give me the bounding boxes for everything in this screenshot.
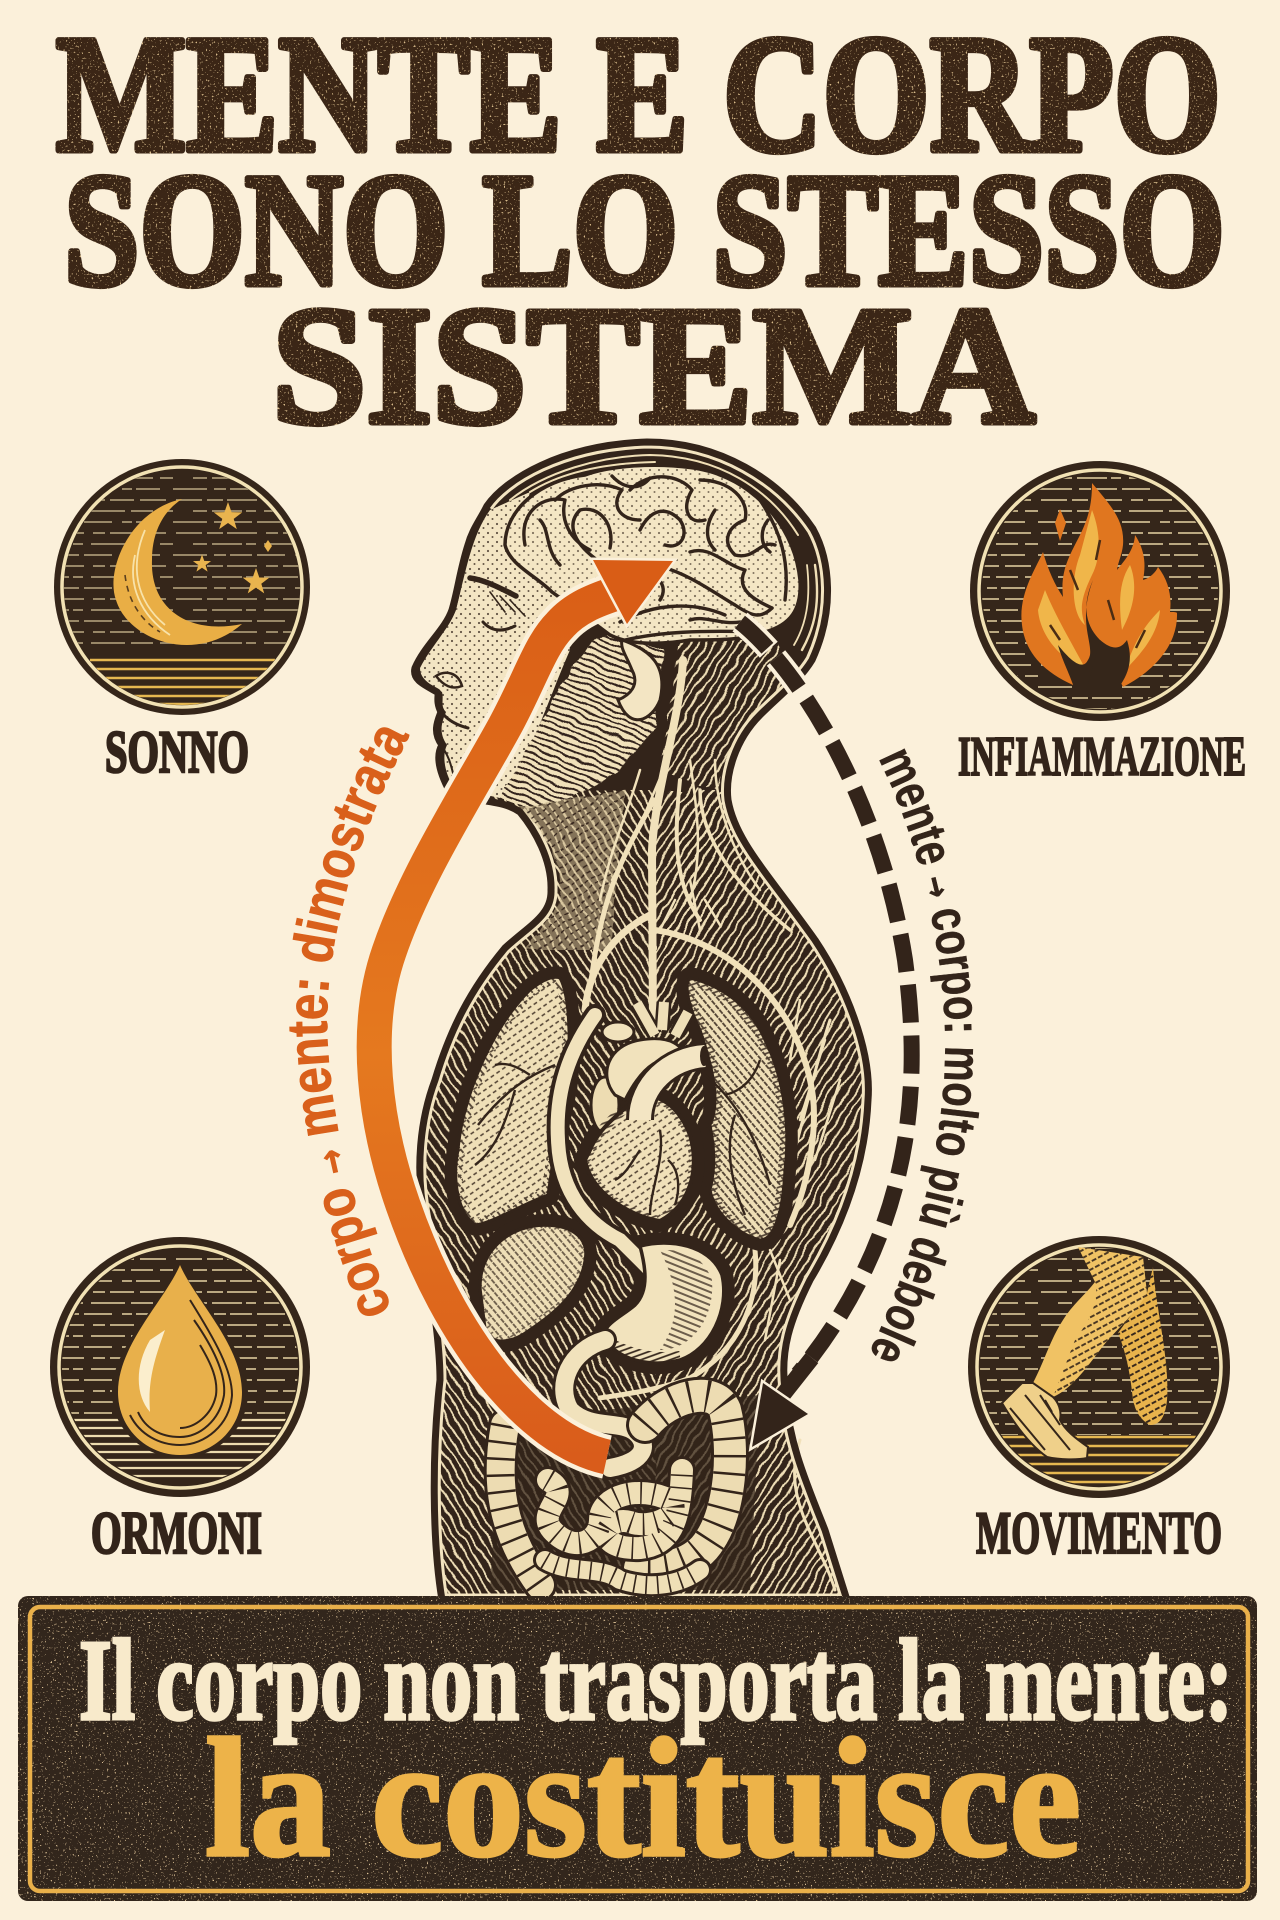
icon: hormone drop [112,1265,248,1458]
right colon [640,1396,730,1568]
icon: crescent moon [113,499,242,645]
icon: stars [193,502,272,593]
intestine bed [490,1395,760,1590]
duodenum [564,1340,643,1468]
title: SISTEMA [272,273,1035,459]
intestines [490,1340,760,1590]
lungs [456,977,787,1240]
medallion: infiammazione [970,461,1230,721]
heart [585,1002,708,1221]
label: sonno: SONNO [105,719,249,785]
facial features [436,578,525,785]
conclusion panel [18,1596,1257,1901]
panel line 2: la costituisce [205,1704,1081,1892]
head and face [420,492,570,798]
curved label: corpo to mente: corpo → mente: dimostrata [289,727,410,1316]
skull bands [510,455,817,650]
medallion: ormoni [50,1237,310,1497]
liver [480,1225,586,1341]
left colon [501,1425,540,1585]
cheek and neck hatching [500,632,795,950]
arrow: mind to body (dashed dark) [740,622,912,1447]
medallion: sonno [54,459,310,715]
arrow: body to mind (orange solid) [374,560,673,1457]
dark bands around organs [456,977,787,1363]
neck nerves [585,660,840,1590]
esophagus tube [558,1015,648,1268]
medallion: movimento [968,1236,1230,1498]
stomach [604,1243,724,1363]
body outline [415,442,868,1600]
body base and hatching [418,446,865,1596]
icon: walking legs and shoe [1002,1247,1167,1459]
icon: flame [1021,483,1177,695]
small intestine [545,1470,700,1585]
brain [505,465,800,643]
title [56,2,1225,459]
ear [618,640,662,720]
label: ormoni: ORMONI [91,1500,262,1566]
curved label: mente to corpo: mente → corpo: molto più debole [872,748,980,1362]
anatomical body figure [400,430,890,1610]
